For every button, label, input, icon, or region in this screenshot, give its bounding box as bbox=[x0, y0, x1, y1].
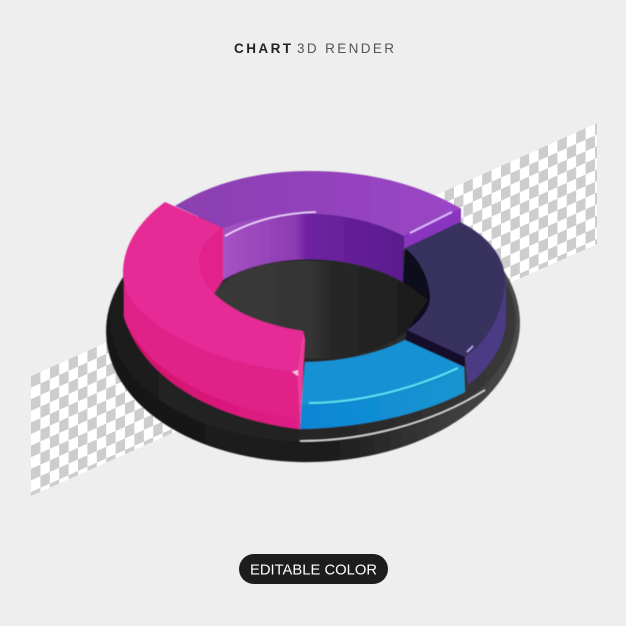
button: editable color bbox=[239, 554, 388, 584]
title bbox=[234, 41, 394, 56]
button: editable color: EDITABLE COLOR bbox=[250, 562, 377, 578]
inner floor bbox=[213, 261, 428, 359]
segment: purple bbox=[175, 171, 461, 282]
3D donut chart bbox=[101, 171, 525, 469]
segment: blue bbox=[300, 340, 465, 429]
segment: navy bbox=[403, 222, 506, 385]
title: 3D RENDER bbox=[297, 41, 394, 56]
segment: pink bbox=[123, 202, 305, 429]
transparency checker band bbox=[31, 123, 597, 496]
platform base bbox=[101, 185, 525, 469]
title: CHART bbox=[234, 41, 292, 56]
